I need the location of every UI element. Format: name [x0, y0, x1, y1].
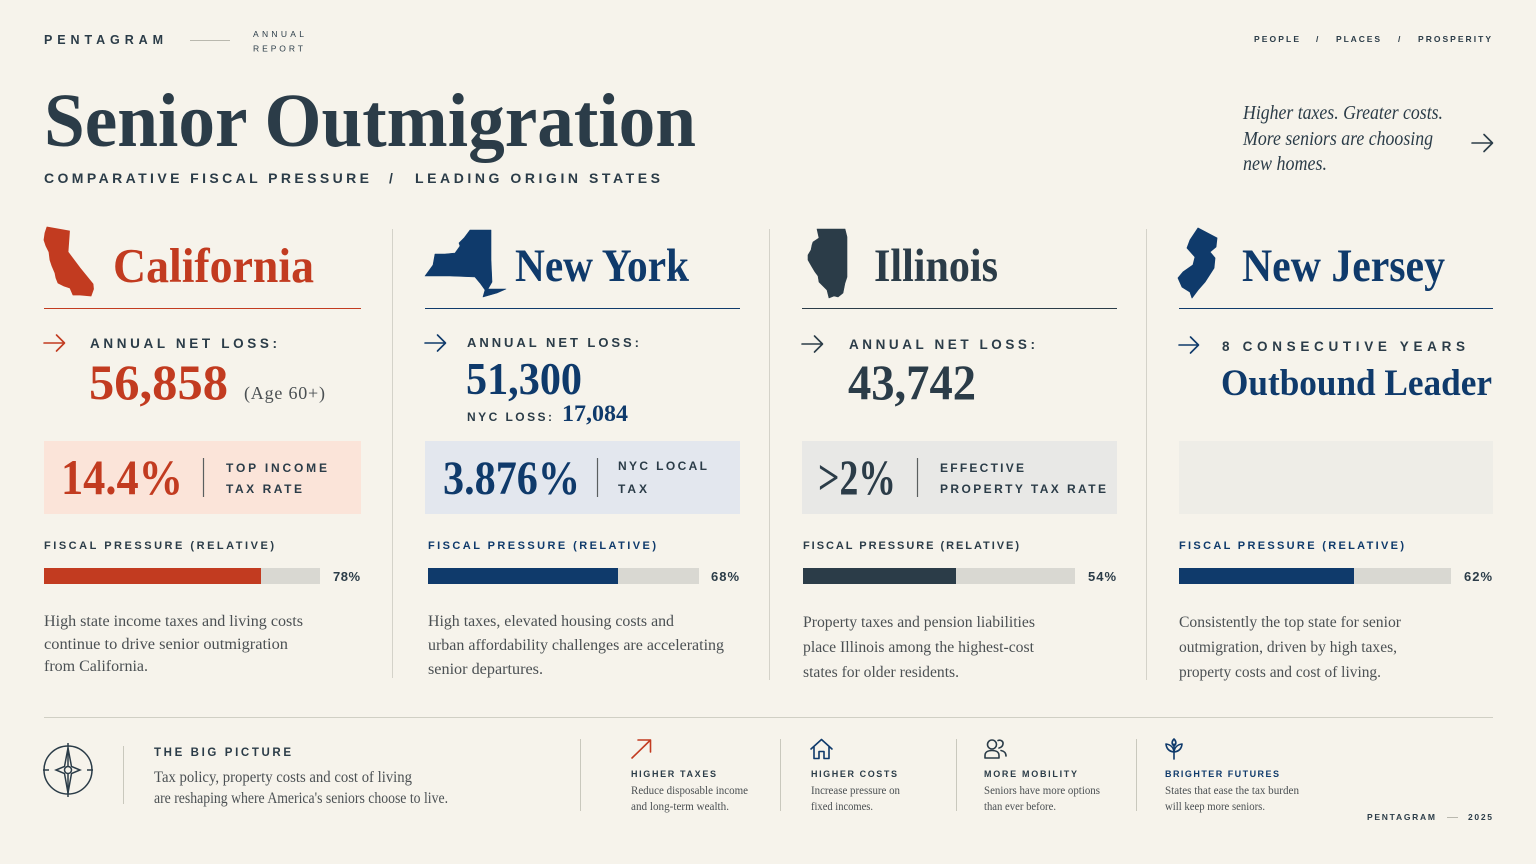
top navigation: PLACES	[1336, 34, 1380, 44]
top navigation: /	[1398, 34, 1401, 44]
description: continue to drive senior outmigration	[44, 636, 288, 653]
bar chart: fiscal pressure	[44, 540, 360, 584]
annual net loss	[848, 337, 1035, 410]
description: Consistently the top state for senior	[1179, 614, 1402, 631]
bar chart: fiscal pressure	[803, 540, 1116, 584]
stat box: effective property tax rate: PROPERTY TAX RATE	[940, 482, 1106, 496]
the big picture: Tax policy, property costs and cost of living	[154, 769, 412, 786]
bar chart: fiscal pressure: 78%	[333, 569, 360, 584]
New Jersey heading: New Jersey	[1242, 240, 1445, 292]
bar chart: fiscal pressure	[1179, 540, 1492, 584]
panel: New Jersey	[1178, 228, 1493, 681]
the big picture: THE BIG PICTURE	[154, 747, 291, 759]
icon: rising arrow	[632, 740, 650, 758]
annual report label	[253, 29, 304, 54]
icon: Illinois map	[808, 229, 847, 298]
item: higher costs: fixed incomes.	[811, 801, 873, 813]
description: senior departures.	[428, 661, 543, 678]
brand name: PENTAGRAM	[44, 33, 163, 47]
icon: tagline arrow	[1472, 134, 1492, 152]
icon: compass	[43, 743, 93, 797]
subtitle: COMPARATIVE FISCAL PRESSURE	[44, 170, 369, 186]
panel: New York	[425, 230, 740, 678]
subtitle: /	[389, 170, 393, 186]
tagline	[1242, 102, 1443, 175]
description	[803, 614, 1035, 681]
bar chart: fiscal pressure: FISCAL PRESSURE (RELATIVE)	[44, 540, 274, 552]
outbound leader: 8 CONSECUTIVE YEARS	[1222, 339, 1465, 354]
annual net loss: 56,858	[89, 354, 228, 410]
stat box: top income tax rate: 14.4%	[61, 449, 183, 505]
description: urban affordability challenges are accelerating	[428, 637, 724, 654]
tagline: Higher taxes. Greater costs.	[1242, 102, 1443, 124]
stat box: effective property tax rate	[802, 441, 1117, 514]
bar chart: fiscal pressure: 54%	[1088, 569, 1116, 584]
annual net loss: 43,742	[848, 354, 976, 410]
annual net loss: (Age 60+)	[244, 383, 325, 404]
item: more mobility: than ever before.	[984, 801, 1056, 813]
icon: sprout	[1166, 739, 1182, 759]
icon: California map	[44, 227, 94, 296]
stat box: NYC local tax: 3.876%	[443, 452, 580, 505]
top navigation: PEOPLE	[1254, 34, 1299, 44]
stat box: NYC local tax	[425, 441, 740, 514]
annual net loss: ANNUAL NET LOSS:	[90, 336, 277, 351]
tagline: More seniors are choosing	[1242, 128, 1433, 150]
description: outmigration, driven by high taxes,	[1179, 639, 1397, 656]
description: from California.	[44, 658, 148, 675]
icon: arrow	[1179, 337, 1198, 353]
footer credit	[1367, 812, 1492, 822]
empty stat box	[1179, 441, 1493, 514]
bar chart: fiscal pressure: FISCAL PRESSURE (RELATIVE)	[1179, 540, 1404, 552]
subtitle	[44, 170, 660, 186]
stat box: top income tax rate: TAX RATE	[226, 482, 302, 496]
item: higher costs	[811, 740, 900, 813]
top navigation: PROSPERITY	[1418, 34, 1491, 44]
item: higher costs: HIGHER COSTS	[811, 769, 897, 779]
icon: arrow	[802, 336, 822, 352]
item: more mobility: MORE MOBILITY	[984, 769, 1077, 779]
bar chart: fiscal pressure: FISCAL PRESSURE (RELATIVE)	[803, 540, 1019, 552]
the big picture: are reshaping where America's seniors choose to live.	[154, 790, 448, 807]
stat box: NYC local tax: TAX	[618, 482, 647, 496]
description: High state income taxes and living costs	[44, 613, 303, 630]
annual report label: REPORT	[253, 44, 303, 54]
description: states for older residents.	[803, 664, 959, 681]
annual net loss: 51,300	[466, 353, 582, 404]
tagline: new homes.	[1243, 153, 1327, 175]
bar chart: fiscal pressure	[428, 540, 739, 584]
footer credit: PENTAGRAM	[1367, 812, 1435, 822]
item: brighter futures: BRIGHTER FUTURES	[1165, 769, 1279, 779]
annual net loss: 17,084	[562, 401, 629, 426]
description	[428, 613, 724, 678]
outbound leader: Outbound Leader	[1221, 363, 1492, 404]
footer credit: 2025	[1468, 812, 1492, 822]
annual net loss	[466, 335, 639, 426]
stat box: NYC local tax: NYC LOCAL	[618, 459, 707, 473]
subtitle: LEADING ORIGIN STATES	[415, 170, 660, 186]
bar chart: fiscal pressure: 62%	[1464, 569, 1492, 584]
icon: arrow	[44, 335, 64, 351]
header bar	[44, 29, 1491, 54]
item: more mobility: Seniors have more options	[984, 785, 1100, 797]
annual net loss: ANNUAL NET LOSS:	[849, 337, 1035, 352]
item: higher taxes: Reduce disposable income	[631, 785, 748, 797]
description: Property taxes and pension liabilities	[803, 614, 1035, 631]
bar chart: fiscal pressure: FISCAL PRESSURE (RELATIVE)	[428, 540, 656, 552]
icon: house	[811, 740, 832, 758]
bar chart: fiscal pressure: 68%	[711, 569, 739, 584]
icon: New Jersey map	[1178, 228, 1217, 298]
icon: people	[985, 740, 1006, 758]
stat box: effective property tax rate: EFFECTIVE	[940, 461, 1024, 475]
title: Senior Outmigration	[44, 79, 696, 163]
panel: Illinois	[802, 229, 1117, 681]
description	[1179, 614, 1402, 681]
top navigation	[1254, 34, 1491, 44]
item: higher costs: Increase pressure on	[811, 785, 900, 797]
item: brighter futures	[1165, 739, 1299, 813]
annual net loss	[89, 336, 325, 410]
item: brighter futures: States that ease the tax burden	[1165, 785, 1299, 797]
Illinois heading: Illinois	[874, 240, 998, 292]
stat box: top income tax rate	[44, 441, 361, 514]
description: property costs and cost of living.	[1179, 664, 1381, 681]
description: High taxes, elevated housing costs and	[428, 613, 674, 630]
the big picture	[154, 747, 448, 807]
item: higher taxes: HIGHER TAXES	[631, 769, 716, 779]
item: higher taxes: and long-term wealth.	[631, 801, 729, 813]
item: brighter futures: will keep more seniors.	[1165, 801, 1265, 813]
description: place Illinois among the highest-cost	[803, 639, 1035, 656]
top navigation: /	[1316, 34, 1319, 44]
California heading: California	[113, 238, 314, 293]
icon: New York map	[425, 230, 506, 297]
item: more mobility	[984, 740, 1100, 813]
stat box: top income tax rate: TOP INCOME	[226, 461, 327, 475]
New York heading: New York	[515, 240, 690, 292]
annual report label: ANNUAL	[253, 29, 304, 39]
panel: California	[44, 227, 361, 675]
annual net loss: NYC LOSS:	[467, 410, 552, 424]
outbound leader	[1221, 339, 1492, 404]
annual net loss: ANNUAL NET LOSS:	[467, 335, 639, 350]
stat box: effective property tax rate: >2%	[818, 449, 896, 505]
description	[44, 613, 303, 675]
icon: arrow	[425, 335, 446, 351]
item: higher taxes	[631, 740, 748, 813]
